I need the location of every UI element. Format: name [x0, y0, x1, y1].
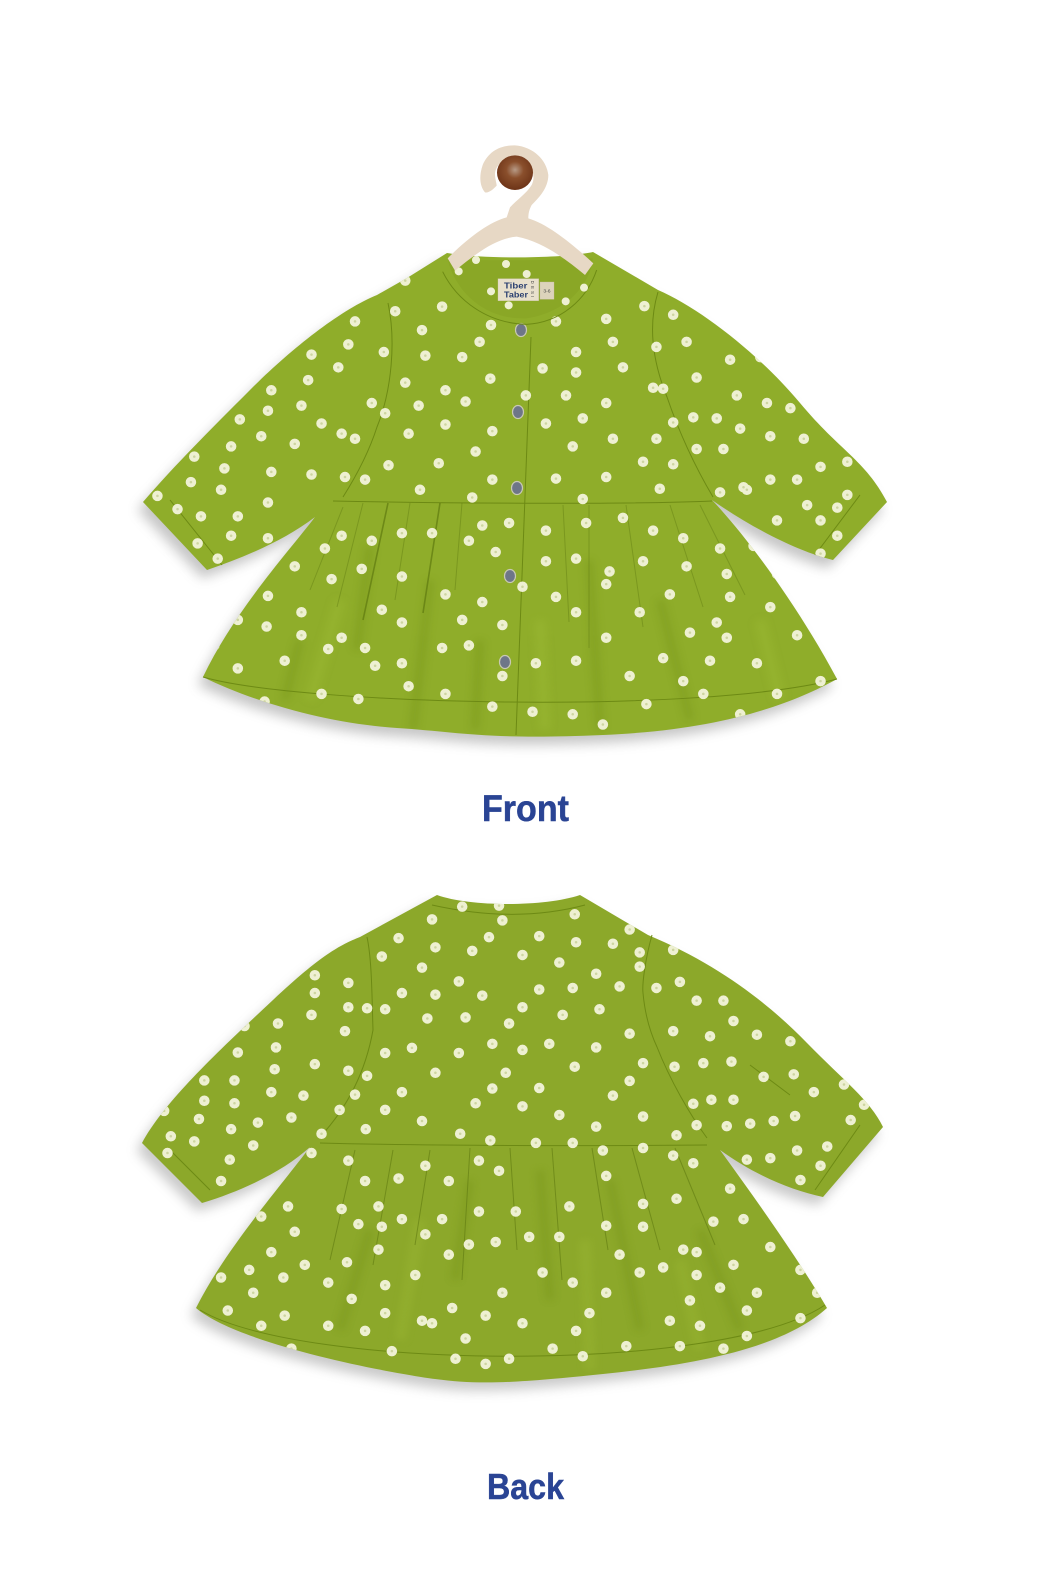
- collar stitch: [443, 270, 597, 324]
- front shadow: [138, 260, 882, 745]
- front silhouette: [143, 252, 887, 737]
- back view of dress: [137, 895, 883, 1390]
- brand label: Tiber: [504, 281, 528, 291]
- back seams and pleats: [170, 905, 860, 1356]
- back silhouette: [142, 895, 883, 1382]
- hanger: [448, 145, 593, 275]
- brand label: [498, 279, 554, 301]
- brand label: Taber: [504, 289, 529, 299]
- inner back neck: [448, 258, 593, 318]
- back caption: Back: [487, 1466, 565, 1507]
- back neck dots: [459, 260, 584, 305]
- hanger knob: [497, 155, 533, 190]
- front seams and pleats: [170, 292, 860, 735]
- brand label: 3-6: [543, 289, 551, 295]
- back fabric dots: [164, 906, 864, 1364]
- front skirt folds: [285, 547, 780, 730]
- front view of dress: [138, 252, 887, 745]
- front caption: Front: [482, 788, 569, 829]
- front fabric dots: [157, 281, 847, 724]
- neckline, label and hanger: [443, 145, 597, 324]
- back shadow: [137, 903, 878, 1390]
- front buttons: [500, 324, 526, 668]
- brand label: DESI: [530, 281, 535, 297]
- back skirt folds: [340, 1170, 740, 1370]
